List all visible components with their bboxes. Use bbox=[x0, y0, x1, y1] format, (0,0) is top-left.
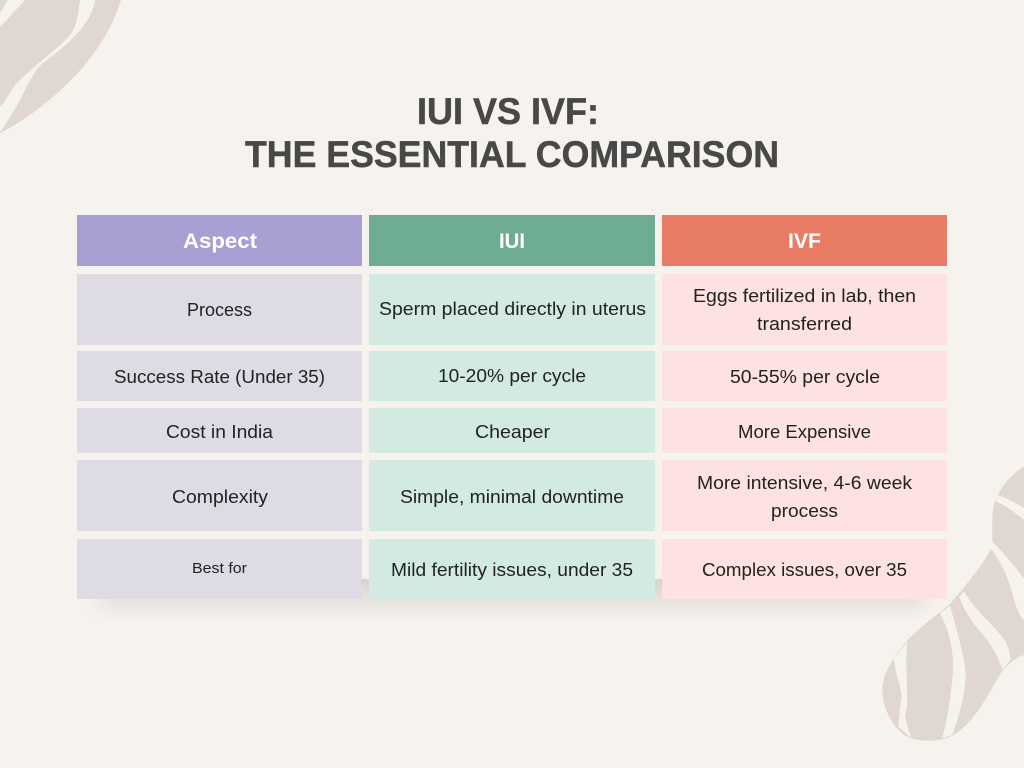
row: Complexity: More intensive, 4-6 week bbox=[697, 473, 913, 493]
row: Success Rate: 50-55% per cycle bbox=[730, 367, 880, 387]
row: Process: Process bbox=[187, 300, 252, 320]
row: Success Rate: 10-20% per cycle bbox=[438, 366, 586, 386]
row: Complexity: process bbox=[771, 501, 838, 521]
header: IVF bbox=[662, 215, 947, 266]
title bbox=[245, 91, 779, 175]
header: IUI bbox=[369, 215, 655, 266]
row: Process: Sperm placed directly in uterus bbox=[379, 299, 646, 319]
row: Best for bbox=[77, 539, 947, 599]
row: Complexity: Simple, minimal downtime bbox=[400, 487, 624, 507]
header: IUI: IUI bbox=[499, 230, 525, 253]
header: Aspect: Aspect bbox=[183, 230, 257, 253]
row: Best for: Best for bbox=[192, 561, 247, 577]
header row bbox=[77, 215, 947, 266]
row: Cost in India: Cost in India bbox=[166, 422, 274, 442]
row: Complexity bbox=[77, 460, 947, 531]
decorative leaf: bottom right bbox=[882, 467, 1024, 741]
row: Process: transferred bbox=[757, 314, 852, 334]
row: Cost in India: Cheaper bbox=[475, 422, 550, 442]
title: THE ESSENTIAL COMPARISON bbox=[245, 134, 779, 175]
header: IVF: IVF bbox=[788, 230, 821, 253]
row: Best for: Mild fertility issues, under 35 bbox=[391, 560, 633, 580]
row: Success Rate bbox=[77, 351, 947, 401]
row: Process: Eggs fertilized in lab, then bbox=[693, 286, 916, 306]
row: Cost in India: More Expensive bbox=[738, 422, 871, 442]
row: Success Rate: Success Rate (Under 35) bbox=[114, 367, 325, 387]
comparison table bbox=[77, 215, 947, 599]
row: Complexity: Complexity bbox=[172, 487, 268, 507]
table shadow bbox=[100, 579, 925, 606]
row: Cost in India bbox=[77, 408, 947, 453]
row: Best for: Complex issues, over 35 bbox=[702, 560, 907, 580]
row: Process bbox=[77, 274, 947, 345]
header: Aspect bbox=[77, 215, 362, 266]
title: IUI VS IVF: bbox=[417, 91, 599, 132]
decorative leaf: top left bbox=[0, 0, 121, 133]
